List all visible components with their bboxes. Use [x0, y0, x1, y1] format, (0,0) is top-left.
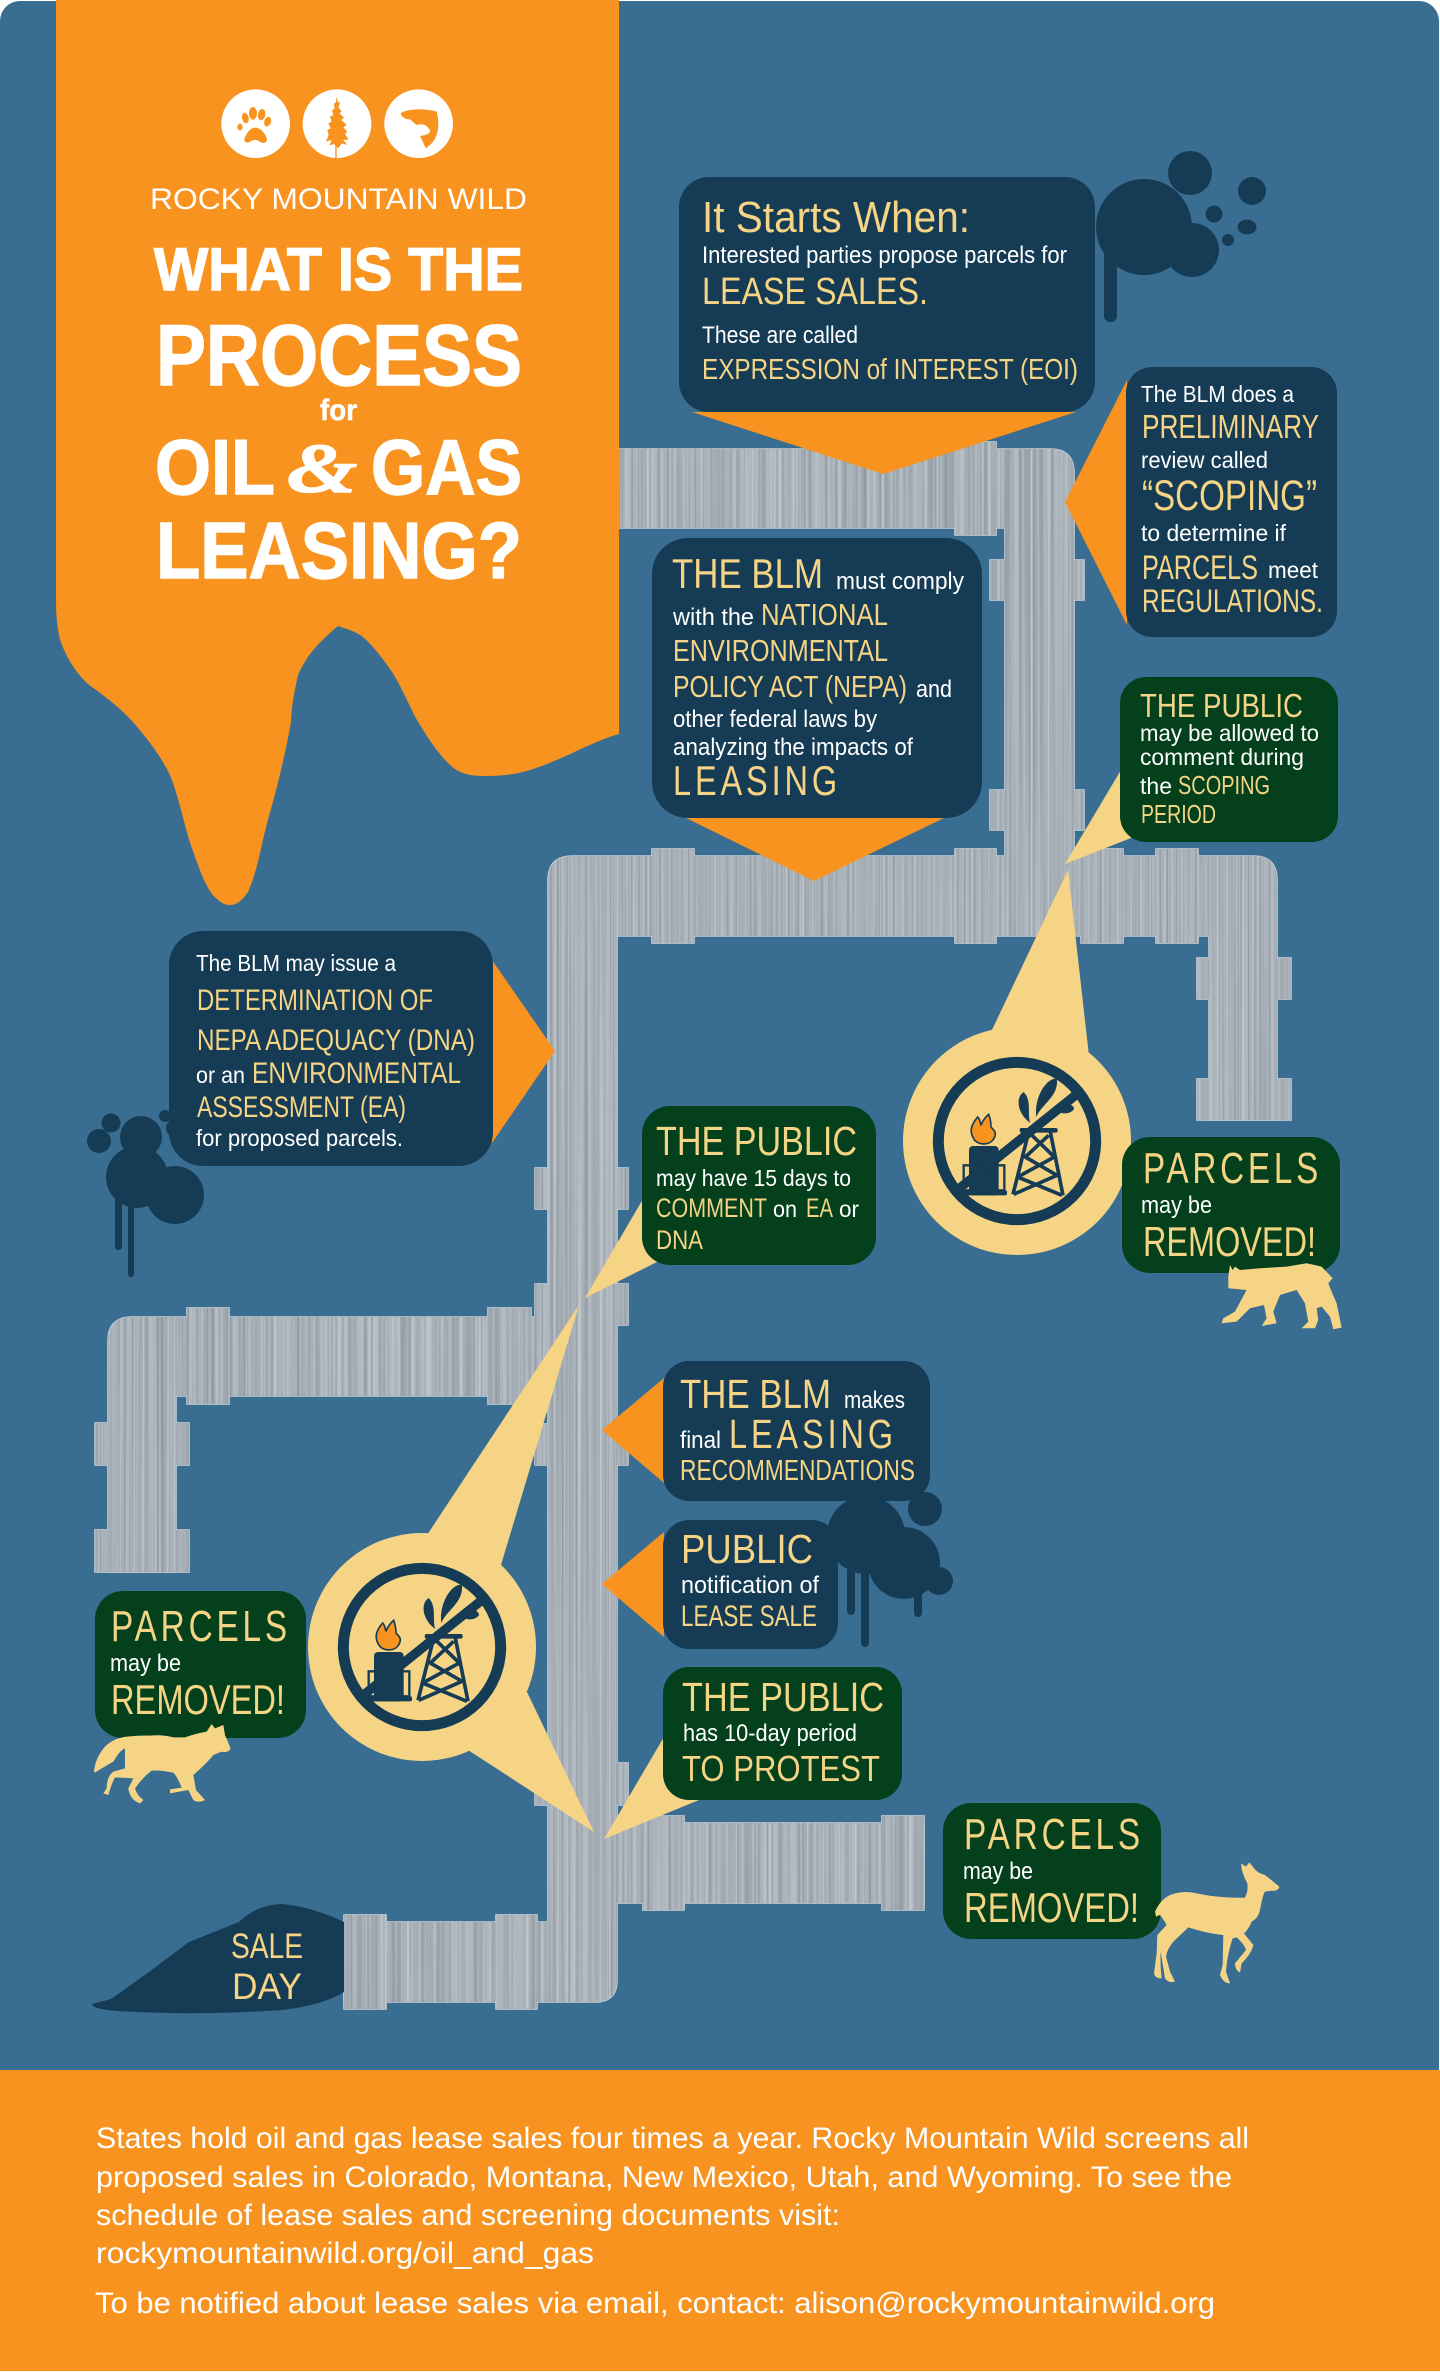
- panel: public notification: LEASE SALE: [681, 1600, 817, 1633]
- panel: the BLM must comply: [652, 538, 982, 881]
- footer text: rockymountainwild.org/oil_and_gas: [96, 2237, 594, 2270]
- panel: parcels removed, lower right: may be: [963, 1858, 1033, 1885]
- icon: no oil rig: [343, 1568, 501, 1726]
- panel: public scoping comment: comment during: [1140, 744, 1304, 770]
- footer text: [95, 2122, 1249, 2320]
- panel: preliminary scoping: to determine if: [1141, 520, 1287, 546]
- title banner: [56, 0, 619, 905]
- ink blob: left: [87, 1110, 204, 1277]
- panel: parcels removed, left: may be: [110, 1650, 181, 1677]
- panel: preliminary scoping: review called: [1141, 447, 1268, 473]
- arrow: down to pipe: [692, 412, 1076, 474]
- panel: public 15 days: on: [773, 1196, 797, 1222]
- panel: BLM final recommendations: LEASING: [729, 1411, 897, 1457]
- panel: parcels removed, lower right: REMOVED!: [964, 1884, 1139, 1931]
- panel: preliminary scoping: REGULATIONS.: [1142, 583, 1323, 619]
- callout: no oil rig, lower: [308, 1305, 594, 1832]
- panel: parcels removed, left: [95, 1591, 306, 1738]
- panel: preliminary scoping: meet: [1268, 557, 1319, 583]
- panel: parcels removed, upper right: [1122, 1137, 1340, 1273]
- icon: paw: [221, 89, 290, 158]
- panel: public 15 days: [585, 1106, 876, 1298]
- panel: it starts when: [679, 177, 1095, 474]
- panel: public notification: notification of: [681, 1572, 819, 1599]
- sale day label: [231, 1927, 303, 2007]
- panel: public 15 days: may have 15 days to: [656, 1165, 851, 1191]
- arrow: to pipe: [492, 960, 555, 1143]
- panel: public scoping comment: [1065, 677, 1338, 864]
- panel: the BLM must comply: analyzing the impacts of: [673, 734, 913, 761]
- sale day mound: [92, 1904, 344, 2013]
- panel: the BLM must comply: THE BLM: [672, 550, 823, 597]
- panel: parcels removed, left: PARCELS: [111, 1602, 291, 1651]
- panel: preliminary scoping: “SCOPING”: [1142, 472, 1317, 520]
- panel: public notification: [602, 1520, 838, 1649]
- panel: determination of NEPA adequacy: DETERMINATION OF: [197, 984, 433, 1017]
- icon: tree: [303, 89, 371, 158]
- panel: the BLM must comply: with the: [672, 604, 754, 631]
- panel: public 15 days: DNA: [656, 1225, 703, 1255]
- panel: public notification: PUBLIC: [681, 1526, 813, 1572]
- title: PROCESS: [156, 308, 522, 404]
- arrow: to pipe: [1065, 380, 1127, 625]
- panel: BLM final recommendations: THE BLM: [680, 1371, 831, 1417]
- arrow: to pipe: [602, 1532, 664, 1637]
- title: [154, 236, 523, 595]
- footer text: States hold oil and gas lease sales four times a year. Rocky Mountain Wild screens all: [96, 2122, 1249, 2155]
- panel: public scoping comment: PERIOD: [1141, 799, 1216, 829]
- icon: wolf: [94, 1724, 231, 1803]
- panel: BLM final recommendations: final: [680, 1427, 721, 1454]
- title: OIL: [155, 423, 275, 511]
- panel: public 15 days: COMMENT: [656, 1193, 767, 1223]
- title: &: [287, 431, 357, 508]
- sale day label: SALE: [231, 1927, 303, 1966]
- panel: preliminary scoping: The BLM does a: [1141, 381, 1294, 407]
- ink blob: lower right: [827, 1492, 953, 1647]
- panel: public protest: TO PROTEST: [682, 1748, 880, 1789]
- panel: the BLM must comply: NATIONAL: [761, 597, 888, 632]
- panel: public 15 days: THE PUBLIC: [656, 1118, 857, 1164]
- icon: lynx: [1222, 1263, 1342, 1329]
- panel: preliminary scoping: PRELIMINARY: [1142, 408, 1319, 445]
- panel: determination of NEPA adequacy: ASSESSMENT (EA): [197, 1091, 406, 1124]
- panel: parcels removed, lower right: [943, 1803, 1161, 1939]
- arrow: to pipe: [585, 1199, 657, 1298]
- panel: the BLM must comply: must comply: [836, 568, 964, 595]
- sale day label: DAY: [232, 1966, 302, 2007]
- panel: public scoping comment: SCOPING: [1178, 770, 1270, 800]
- panel: it starts when: These are called: [702, 322, 858, 349]
- arrow: to pipe: [1065, 770, 1131, 864]
- arrow: to pipe: [604, 1737, 699, 1839]
- panel: the BLM must comply: and: [916, 676, 952, 703]
- panel: parcels removed, upper right: PARCELS: [1143, 1144, 1322, 1193]
- panel: public protest: THE PUBLIC: [682, 1674, 884, 1720]
- arrow: to pipe: [602, 1378, 664, 1483]
- panel: it starts when: EXPRESSION of INTEREST (EOI): [702, 354, 1078, 386]
- panel: determination of NEPA adequacy: The BLM may issue a: [196, 950, 396, 976]
- panel: public 15 days: EA: [806, 1193, 833, 1223]
- logo icons: [221, 89, 453, 158]
- panel: determination of NEPA adequacy: ENVIRONMENTAL: [252, 1057, 461, 1090]
- footer text: proposed sales in Colorado, Montana, New Mexico, Utah, and Wyoming. To see the: [96, 2161, 1232, 2194]
- panel: public 15 days: or: [839, 1196, 859, 1222]
- panel: BLM final recommendations: makes: [844, 1387, 905, 1414]
- icon: no oil rig: [938, 1062, 1096, 1220]
- callout: no oil rig, upper: [903, 870, 1131, 1255]
- panel: public scoping comment: the: [1140, 773, 1172, 799]
- panel: the BLM must comply: POLICY ACT (NEPA): [673, 669, 907, 704]
- footer text: To be notified about lease sales via email, contact: alison@rockymountainwild.org: [95, 2287, 1215, 2320]
- footer text: schedule of lease sales and screening documents visit:: [96, 2199, 840, 2232]
- footer band: [0, 2070, 1440, 2371]
- panel: the BLM must comply: LEASING: [673, 757, 841, 804]
- panel: determination of NEPA adequacy: NEPA ADEQUACY (DNA): [197, 1024, 475, 1057]
- panel: preliminary scoping: [1065, 367, 1337, 637]
- icon: deer: [1154, 1862, 1279, 1983]
- panel: the BLM must comply: ENVIRONMENTAL: [673, 633, 888, 668]
- panel: public scoping comment: may be allowed to: [1140, 720, 1319, 746]
- arrow: down to pipe: [686, 818, 944, 881]
- panel: it starts when: It Starts When:: [702, 193, 970, 242]
- panel: public scoping comment: THE PUBLIC: [1140, 687, 1303, 724]
- pipeline network: [94, 441, 1292, 2010]
- panel: BLM final recommendations: [602, 1361, 930, 1501]
- organisation name: ROCKY MOUNTAIN WILD: [150, 183, 527, 216]
- panel: public protest: has 10-day period: [683, 1720, 857, 1747]
- panel: the BLM must comply: other federal laws by: [673, 706, 877, 733]
- title: for: [320, 394, 357, 427]
- title: GAS: [371, 423, 522, 511]
- panel: parcels removed, left: REMOVED!: [111, 1676, 285, 1723]
- title: LEASING?: [156, 506, 522, 595]
- panel: preliminary scoping: PARCELS: [1142, 549, 1258, 587]
- panel: determination of NEPA adequacy: [169, 931, 555, 1166]
- panel: determination of NEPA adequacy: for proposed parcels.: [196, 1125, 403, 1151]
- panel: parcels removed, upper right: REMOVED!: [1143, 1218, 1316, 1265]
- panel: BLM final recommendations: RECOMMENDATIONS: [680, 1455, 915, 1487]
- panel: determination of NEPA adequacy: or an: [196, 1062, 245, 1088]
- panel: it starts when: LEASE SALES.: [702, 271, 928, 313]
- title: WHAT IS THE: [154, 236, 523, 303]
- panel: parcels removed, lower right: PARCELS: [964, 1810, 1144, 1859]
- ink blob: top right: [1096, 151, 1266, 322]
- panel: parcels removed, upper right: may be: [1141, 1192, 1212, 1219]
- icon: fish: [384, 89, 453, 158]
- panel: public protest: [604, 1667, 902, 1839]
- panel: it starts when: Interested parties propose parcels for: [702, 242, 1067, 269]
